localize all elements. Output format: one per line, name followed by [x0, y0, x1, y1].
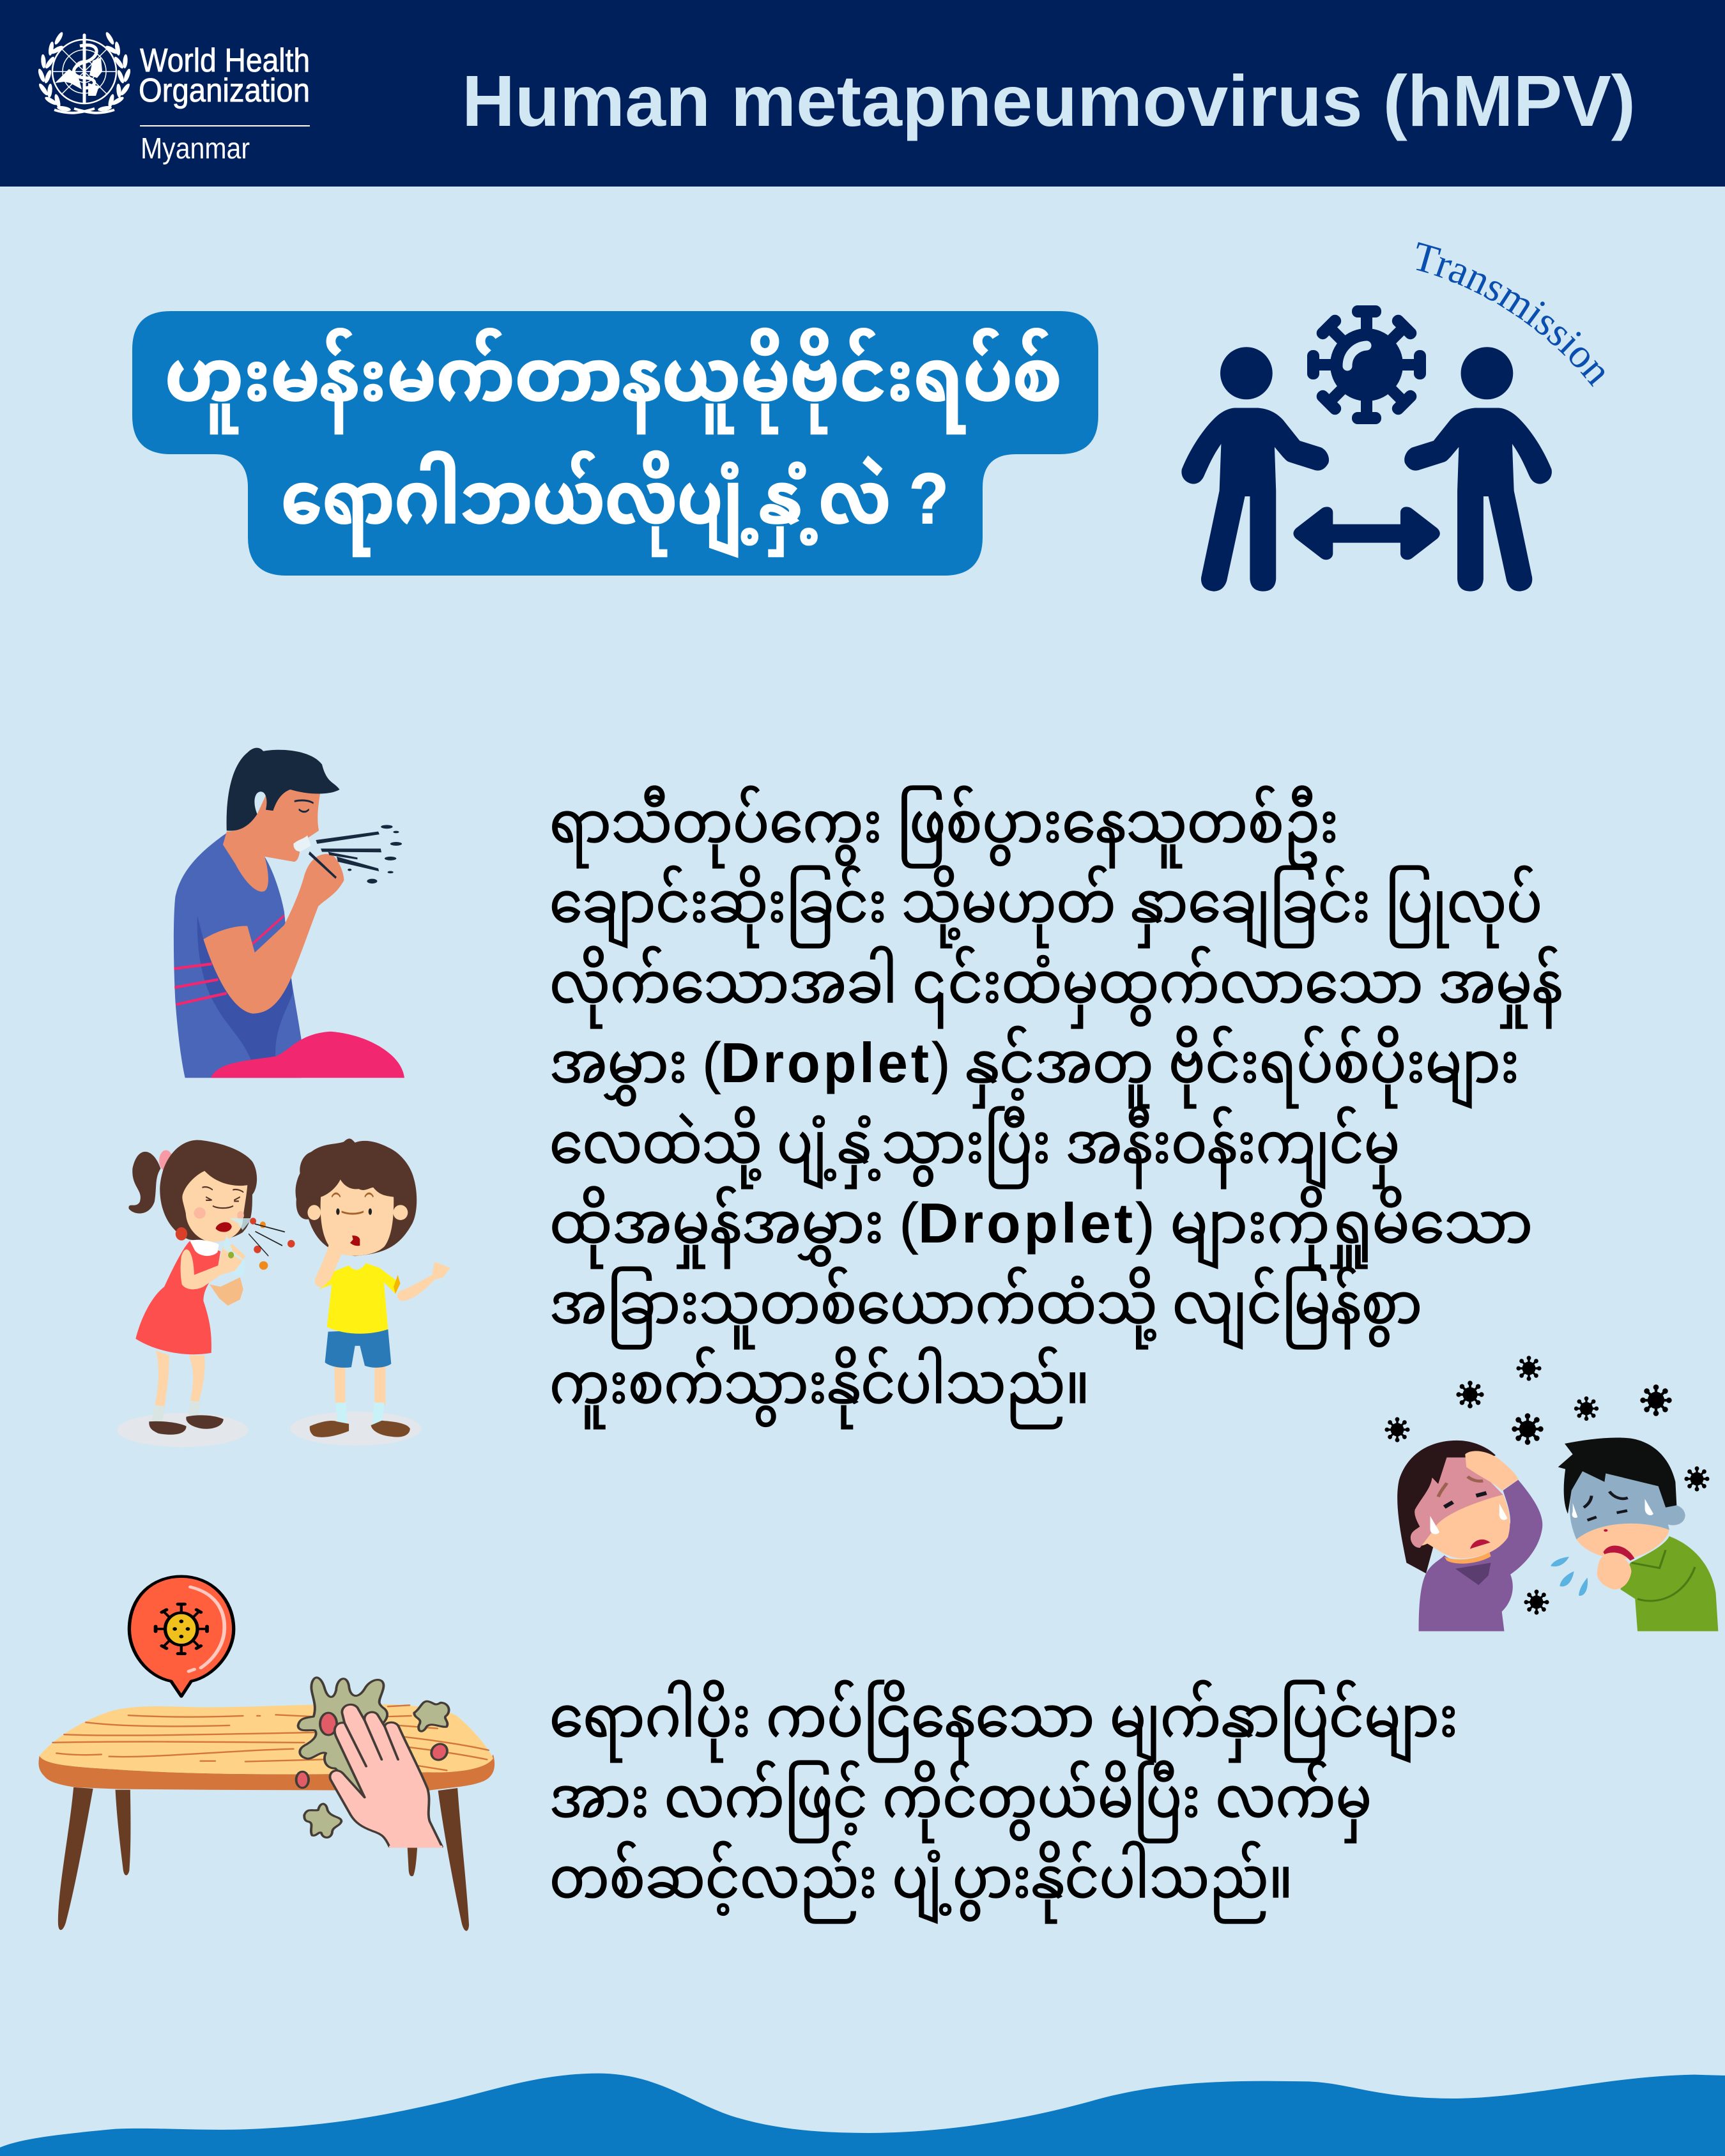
- paragraph: droplet transmission: လိုက်သောအခါ ၎င်းထံမှထွက်လာသော အမှုန်: [549, 946, 1563, 1028]
- curved label: Transmission: Transmission: [1416, 242, 1605, 387]
- paragraph: droplet transmission: ကူးစက်သွားနိုင်ပါသည်။: [549, 1347, 1090, 1429]
- right person: [1404, 347, 1552, 592]
- left person: [1181, 347, 1329, 592]
- hand: [330, 1704, 442, 1847]
- paragraph: droplet transmission: ထိုအမှုန်အမွှား (Droplet) များကိုရှူမိသော: [549, 1186, 1533, 1269]
- woman: [1397, 1441, 1542, 1632]
- girl: [128, 1140, 295, 1435]
- virus icon: [1307, 305, 1426, 424]
- WHO wordmark: [139, 42, 310, 165]
- boy: [296, 1138, 450, 1437]
- WHO wordmark: World Health: [140, 42, 310, 79]
- illustration: table with germs and hand: [38, 1577, 494, 1931]
- table legs: [58, 1787, 469, 1931]
- icon: transmission between two people: [1181, 242, 1605, 592]
- double-headed arrow: [1293, 507, 1440, 560]
- heading line 1: ဟူးမန်းမက်တာနယူမိုဗိုင်းရပ်စ်: [165, 328, 1062, 434]
- page title: Human metapneumovirus (hMPV): [462, 61, 1636, 141]
- paragraph: droplet transmission: လေထဲသို့ ပျံ့နှံ့သွားပြီး အနီးဝန်းကျင်မှ: [549, 1106, 1400, 1189]
- paragraph: droplet transmission: [549, 786, 1563, 1429]
- paragraph: droplet transmission: အခြားသူတစ်ယောက်ထံသို့ လျင်မြန်စွာ: [549, 1267, 1422, 1350]
- man: [1551, 1437, 1718, 1632]
- heading line 2: ရောဂါဘယ်လိုပျံ့နှံ့လဲ ?: [281, 451, 949, 558]
- bottom wave: [0, 2074, 1725, 2156]
- header band: [0, 0, 1725, 187]
- paragraph: surface transmission: တစ်ဆင့်လည်း ပျံ့ပွားနိုင်ပါသည်။: [549, 1841, 1293, 1924]
- WHO logo emblem: [37, 31, 132, 113]
- paragraph: droplet transmission: ချောင်းဆိုးခြင်း သို့မဟုတ် နှာချေခြင်း ပြုလုပ်: [549, 866, 1542, 949]
- illustration: girl sneezing near boy: [117, 1138, 450, 1447]
- paragraph: surface transmission: ရောဂါပိုး ကပ်ငြိနေသော မျက်နှာပြင်များ: [549, 1680, 1458, 1763]
- sneeze spray: [309, 825, 402, 883]
- WHO wordmark: Myanmar: [141, 132, 250, 165]
- paragraph: surface transmission: အား လက်ဖြင့် ကိုင်တွယ်မိပြီး လက်မှ: [549, 1761, 1372, 1843]
- boy hair: [296, 1138, 417, 1256]
- germ balloon icon: [129, 1577, 234, 1696]
- WHO wordmark: Organization: [139, 72, 310, 109]
- ground shadows: [117, 1412, 421, 1447]
- paragraph: droplet transmission: ရာသီတုပ်ကွေး ဖြစ်ပွားနေသူတစ်ဦး: [549, 786, 1338, 868]
- illustration: sick couple coughing: [1384, 1356, 1718, 1632]
- germ smear: [298, 1678, 449, 1837]
- heading panel: [132, 311, 1098, 576]
- paragraph: droplet transmission: အမွှား (Droplet) နှင့်အတူ ဗိုင်းရပ်စ်ပိုးများ: [549, 1026, 1519, 1109]
- virus particles: [176, 1218, 295, 1270]
- paragraph: surface transmission: [549, 1680, 1458, 1924]
- table top: [38, 1754, 494, 1791]
- black virus particles: [1384, 1356, 1710, 1615]
- illustration: man sneezing: [174, 748, 404, 1078]
